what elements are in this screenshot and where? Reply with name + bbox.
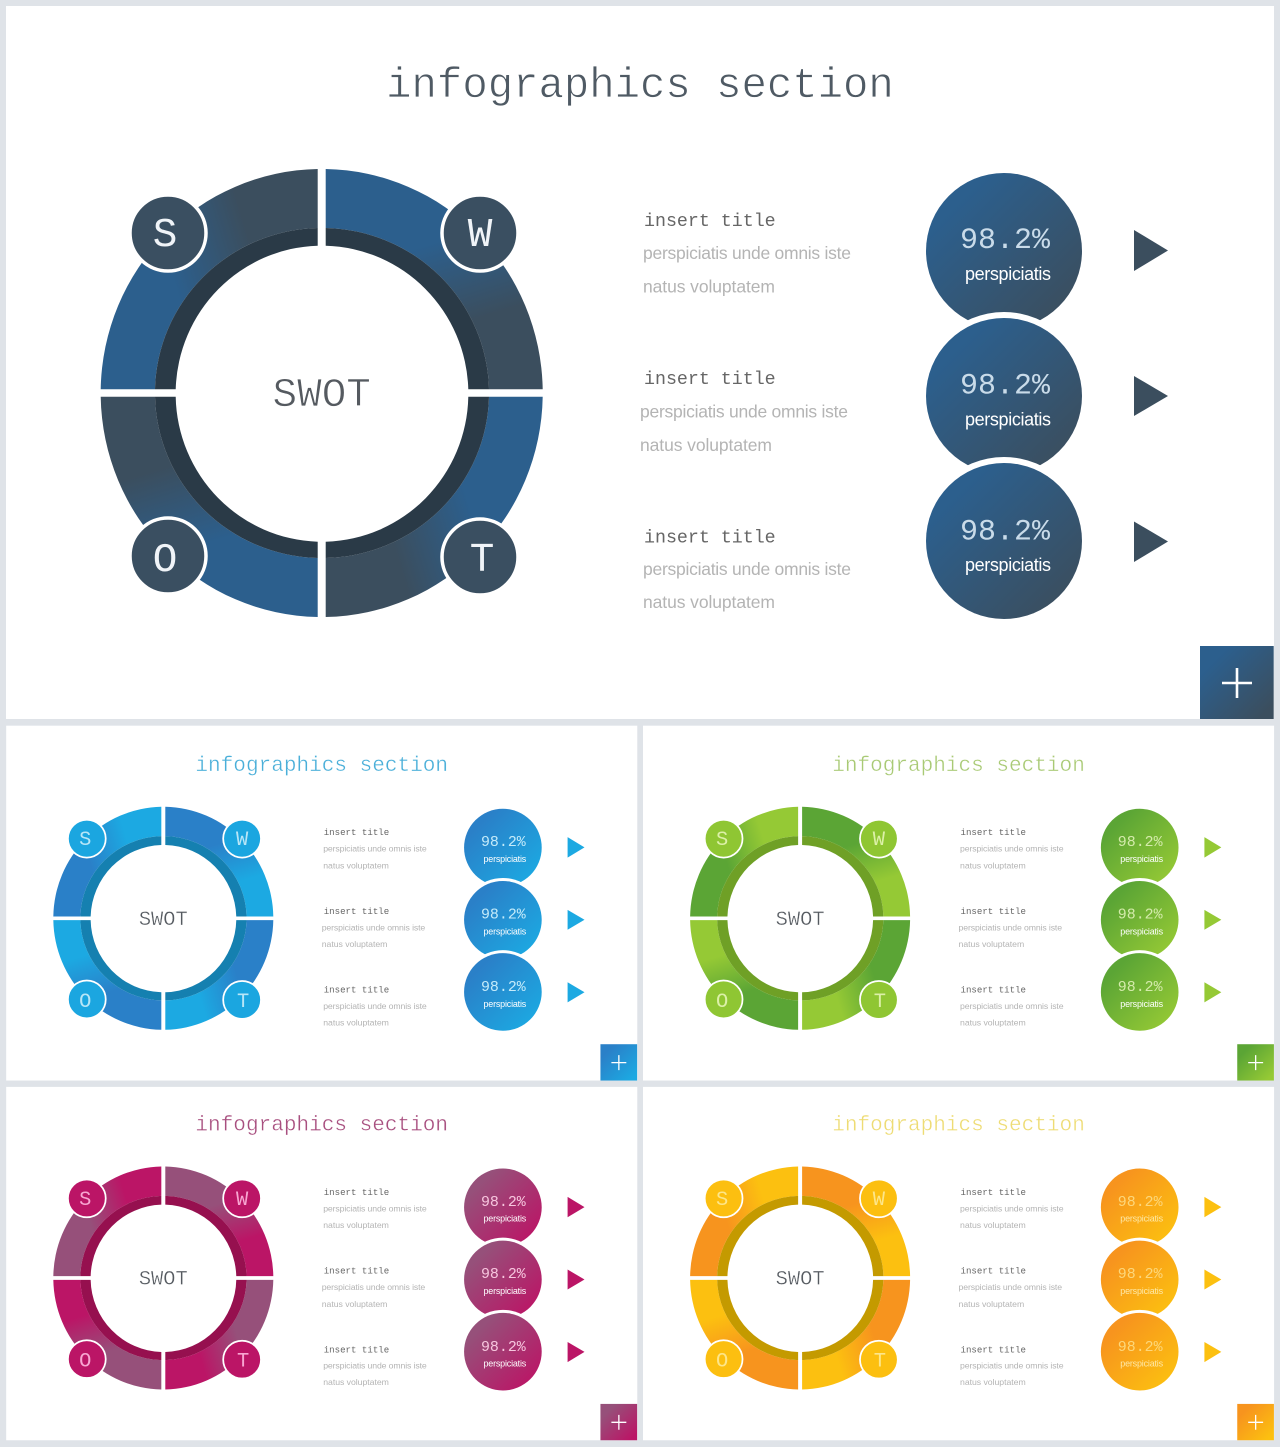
text block 1: natus voluptatem [323,860,389,870]
stat circle 3 [461,950,545,1034]
stat circle 3 [461,1310,545,1393]
SWOT ring chart [101,169,543,617]
inner dark ring [717,1196,883,1360]
text block 3 [643,528,851,612]
text block 2: natus voluptatem [640,435,772,455]
segment: O quadrant [53,920,161,1030]
badge: W [223,1179,261,1217]
segment: W quadrant [165,807,273,916]
segment: S quadrant [690,1167,798,1276]
segment: S quadrant [101,169,318,389]
arrow 2 [1134,376,1168,416]
stat circle 3: perspiciatis [1120,1359,1164,1369]
text block 3: perspiciatis unde omnis iste [323,1001,427,1011]
text block 2: insert title [961,1266,1026,1277]
badge: O [68,981,106,1018]
text block 3: insert title [324,985,389,996]
stat circle 3: 98.2% [481,1340,526,1356]
badge: O [705,981,743,1018]
text block 1 [323,827,427,870]
text block 2: natus voluptatem [322,1299,387,1309]
stat circle 1 [1101,809,1179,886]
stat circle 2 [920,312,1088,480]
stat circle 2 [461,878,545,962]
text block 2 [959,906,1062,949]
badge: T: T [237,1351,249,1374]
SWOT ring chart [690,807,910,1030]
panel: amber SWOT slide [643,1087,1274,1440]
inner dark ring [155,228,489,558]
stat circle 1 [926,173,1082,329]
text block 1 [323,1187,427,1230]
center label: SWOT [776,1268,825,1291]
arrow 1 [568,837,585,858]
badge: O: O [716,991,728,1014]
stat circle 3: perspiciatis [483,999,527,1009]
stat circle 1: perspiciatis [1120,854,1164,864]
badge: T: T [874,991,886,1014]
title: infographics section [386,62,894,110]
text block 3 [323,1344,427,1387]
text block 3 [960,985,1064,1027]
SWOT ring chart [690,1167,910,1389]
badge: W [223,820,261,858]
badge: W: W [873,1189,886,1212]
badge: S [705,820,743,858]
segment: O quadrant [690,1280,798,1389]
segment: O quadrant [53,1280,161,1389]
segment: T quadrant [802,920,910,1030]
stat circle 3 [1098,1310,1181,1393]
text block 3: natus voluptatem [323,1377,389,1387]
text block 1: perspiciatis unde omnis iste [960,844,1064,854]
text block 2: natus voluptatem [959,939,1024,949]
stat circle 2 [461,1238,545,1321]
badge: W: W [236,829,249,852]
text block 1: natus voluptatem [960,1220,1026,1230]
text block 2: perspiciatis unde omnis iste [959,1282,1062,1292]
text block 3: insert title [961,985,1026,996]
text block 1: perspiciatis unde omnis iste [960,1203,1064,1213]
badge: T [223,1341,261,1379]
panel: green SWOT slide [643,726,1274,1081]
center label: SWOT [776,909,825,932]
stat circle 2: 98.2% [1118,1267,1163,1283]
text block 2: insert title [324,906,389,917]
text block 1: natus voluptatem [643,276,775,296]
segment: W quadrant [802,1167,910,1276]
stat circle 3: 98.2% [1118,1340,1163,1356]
text block 3: perspiciatis unde omnis iste [960,1001,1064,1011]
text block 3: perspiciatis unde omnis iste [960,1361,1064,1371]
arrow 2 [568,910,585,930]
text block 3: perspiciatis unde omnis iste [323,1361,427,1371]
stat circle 1: perspiciatis [965,264,1051,284]
stat circle 1: 98.2% [1118,835,1163,851]
text block 2 [322,906,425,949]
badge: W [860,820,898,858]
badge: S [130,195,206,271]
text block 3: insert title [644,528,776,548]
stat circle 2: perspiciatis [1120,1286,1164,1296]
stat circle 1 [464,1169,542,1246]
SWOT ring chart [53,1167,273,1389]
text block 1: insert title [644,212,776,232]
stat circle 2 [1098,878,1181,962]
text block 1: perspiciatis unde omnis iste [323,1203,427,1213]
arrow 2 [568,1270,585,1289]
arrow 3 [568,1342,585,1362]
text block 1: insert title [961,827,1026,838]
text block 3: insert title [961,1344,1026,1355]
segment: T quadrant [802,1280,910,1389]
badge: O [705,1340,743,1378]
plus button [600,1404,637,1440]
arrow 1 [1204,1197,1221,1217]
plus button [1237,1044,1274,1081]
text block 2: natus voluptatem [959,1299,1024,1309]
arrow 1 [1134,230,1168,271]
text block 1: perspiciatis unde omnis iste [323,844,427,854]
badge: T: T [874,1351,886,1374]
badge: T [860,981,898,1019]
stat circle 1: 98.2% [960,224,1051,258]
badge: O [130,518,206,594]
badge: S: S [716,1189,728,1212]
stat circle 2: 98.2% [960,370,1051,404]
stat circle 2: 98.2% [481,1267,526,1283]
badge: W [442,195,518,271]
text block 3 [323,985,427,1027]
text block 1: insert title [324,1187,389,1198]
text block 1 [960,827,1064,870]
text block 3: natus voluptatem [323,1017,389,1027]
text block 3: perspiciatis unde omnis iste [643,559,851,579]
stat circle 3: perspiciatis [483,1359,527,1369]
text block 2 [640,370,848,455]
text block 2: insert title [644,370,776,390]
panel: main navy SWOT slide [6,6,1274,719]
stat circle 2: perspiciatis [483,926,527,936]
segment: S quadrant [690,807,798,916]
text block 1 [643,212,851,296]
text block 1: perspiciatis unde omnis iste [643,243,851,263]
inner dark ring [80,836,247,1000]
SWOT ring chart [53,807,273,1030]
badge: S: S [153,213,177,259]
badge: O [68,1340,106,1378]
text block 3: natus voluptatem [643,592,775,612]
stat circle 3: 98.2% [481,980,526,996]
badge: T: T [237,991,249,1014]
text block 2: perspiciatis unde omnis iste [322,1282,425,1292]
title: infographics section [195,754,448,778]
stat circle 1 [1101,1169,1179,1246]
badge: T [860,1341,898,1379]
arrow 3 [568,982,585,1002]
badge: W [860,1179,898,1217]
plus button [600,1044,637,1081]
arrow 1 [568,1197,585,1217]
stat circle 1: 98.2% [1118,1195,1163,1211]
stat circle 3: perspiciatis [1120,999,1164,1009]
segment: W quadrant [165,1167,273,1276]
text block 2: natus voluptatem [322,939,387,949]
stat circle 2: perspiciatis [483,1286,527,1296]
badge: W: W [236,1189,249,1212]
text block 1: insert title [324,827,389,838]
text block 1 [960,1187,1064,1230]
text block 2 [959,1266,1062,1309]
stat circle 3 [920,457,1088,625]
text block 2: perspiciatis unde omnis iste [640,402,848,422]
title: infographics section [832,1114,1085,1138]
panel: cyan SWOT slide [6,726,637,1081]
segment: O quadrant [101,397,318,617]
text block 1: insert title [961,1187,1026,1198]
segment: T quadrant [165,1280,273,1389]
segment: T quadrant [326,397,543,617]
stat circle 1: perspiciatis [483,854,527,864]
panel: magenta SWOT slide [6,1087,637,1440]
plus button [1200,646,1274,719]
text block 1: natus voluptatem [323,1220,389,1230]
stat circle 2 [1098,1238,1181,1321]
stat circle 1: 98.2% [481,835,526,851]
plus button [1237,1404,1274,1440]
center label: SWOT [139,1268,188,1291]
segment: W quadrant [802,807,910,916]
badge: O: O [79,991,91,1014]
stat circle 1: perspiciatis [1120,1214,1164,1224]
text block 2: perspiciatis unde omnis iste [322,922,425,932]
center label: SWOT [139,909,188,932]
stat circle 1: 98.2% [481,1195,526,1211]
segment: O quadrant [690,920,798,1030]
text block 3: natus voluptatem [960,1017,1026,1027]
badge: W: W [873,829,886,852]
stat circle 2: 98.2% [1118,908,1163,924]
text block 2: insert title [961,906,1026,917]
text block 1: natus voluptatem [960,860,1026,870]
badge: O: O [79,1351,91,1374]
badge: S: S [79,829,91,852]
badge: T [442,519,518,595]
stat circle 1 [464,809,542,886]
badge: S [68,1179,106,1217]
inner dark ring [80,1196,247,1360]
text block 3 [960,1344,1064,1387]
text block 2: perspiciatis unde omnis iste [959,922,1062,932]
arrow 3 [1204,982,1221,1002]
text block 3: natus voluptatem [960,1377,1026,1387]
arrow 2 [1204,910,1221,930]
badge: S: S [716,829,728,852]
arrow 3 [1204,1342,1221,1362]
text block 2: insert title [324,1266,389,1277]
arrow 2 [1204,1270,1221,1289]
center label: SWOT [272,373,371,419]
stat circle 3: 98.2% [960,516,1051,550]
arrow 1 [1204,837,1221,858]
badge: S [705,1179,743,1217]
badge: O: O [716,1351,728,1374]
text block 3: insert title [324,1344,389,1355]
badge: T: T [470,538,494,584]
segment: S quadrant [53,1167,161,1276]
title: infographics section [832,754,1085,778]
badge: O: O [153,538,177,584]
segment: T quadrant [165,920,273,1030]
segment: W quadrant [326,169,543,389]
badge: S [68,820,106,858]
stat circle 2: 98.2% [481,908,526,924]
text block 2 [322,1266,425,1309]
arrow 3 [1134,522,1168,562]
stat circle 2: perspiciatis [965,410,1051,430]
inner dark ring [717,836,883,1000]
stat circle 3: perspiciatis [965,555,1051,575]
stat circle 3: 98.2% [1118,980,1163,996]
stat circle 1: perspiciatis [483,1214,527,1224]
title: infographics section [195,1114,448,1138]
segment: S quadrant [53,807,161,916]
badge: S: S [79,1189,91,1212]
badge: W: W [468,213,493,259]
stat circle 3 [1098,950,1181,1034]
stat circle 2: perspiciatis [1120,926,1164,936]
badge: T [223,981,261,1019]
